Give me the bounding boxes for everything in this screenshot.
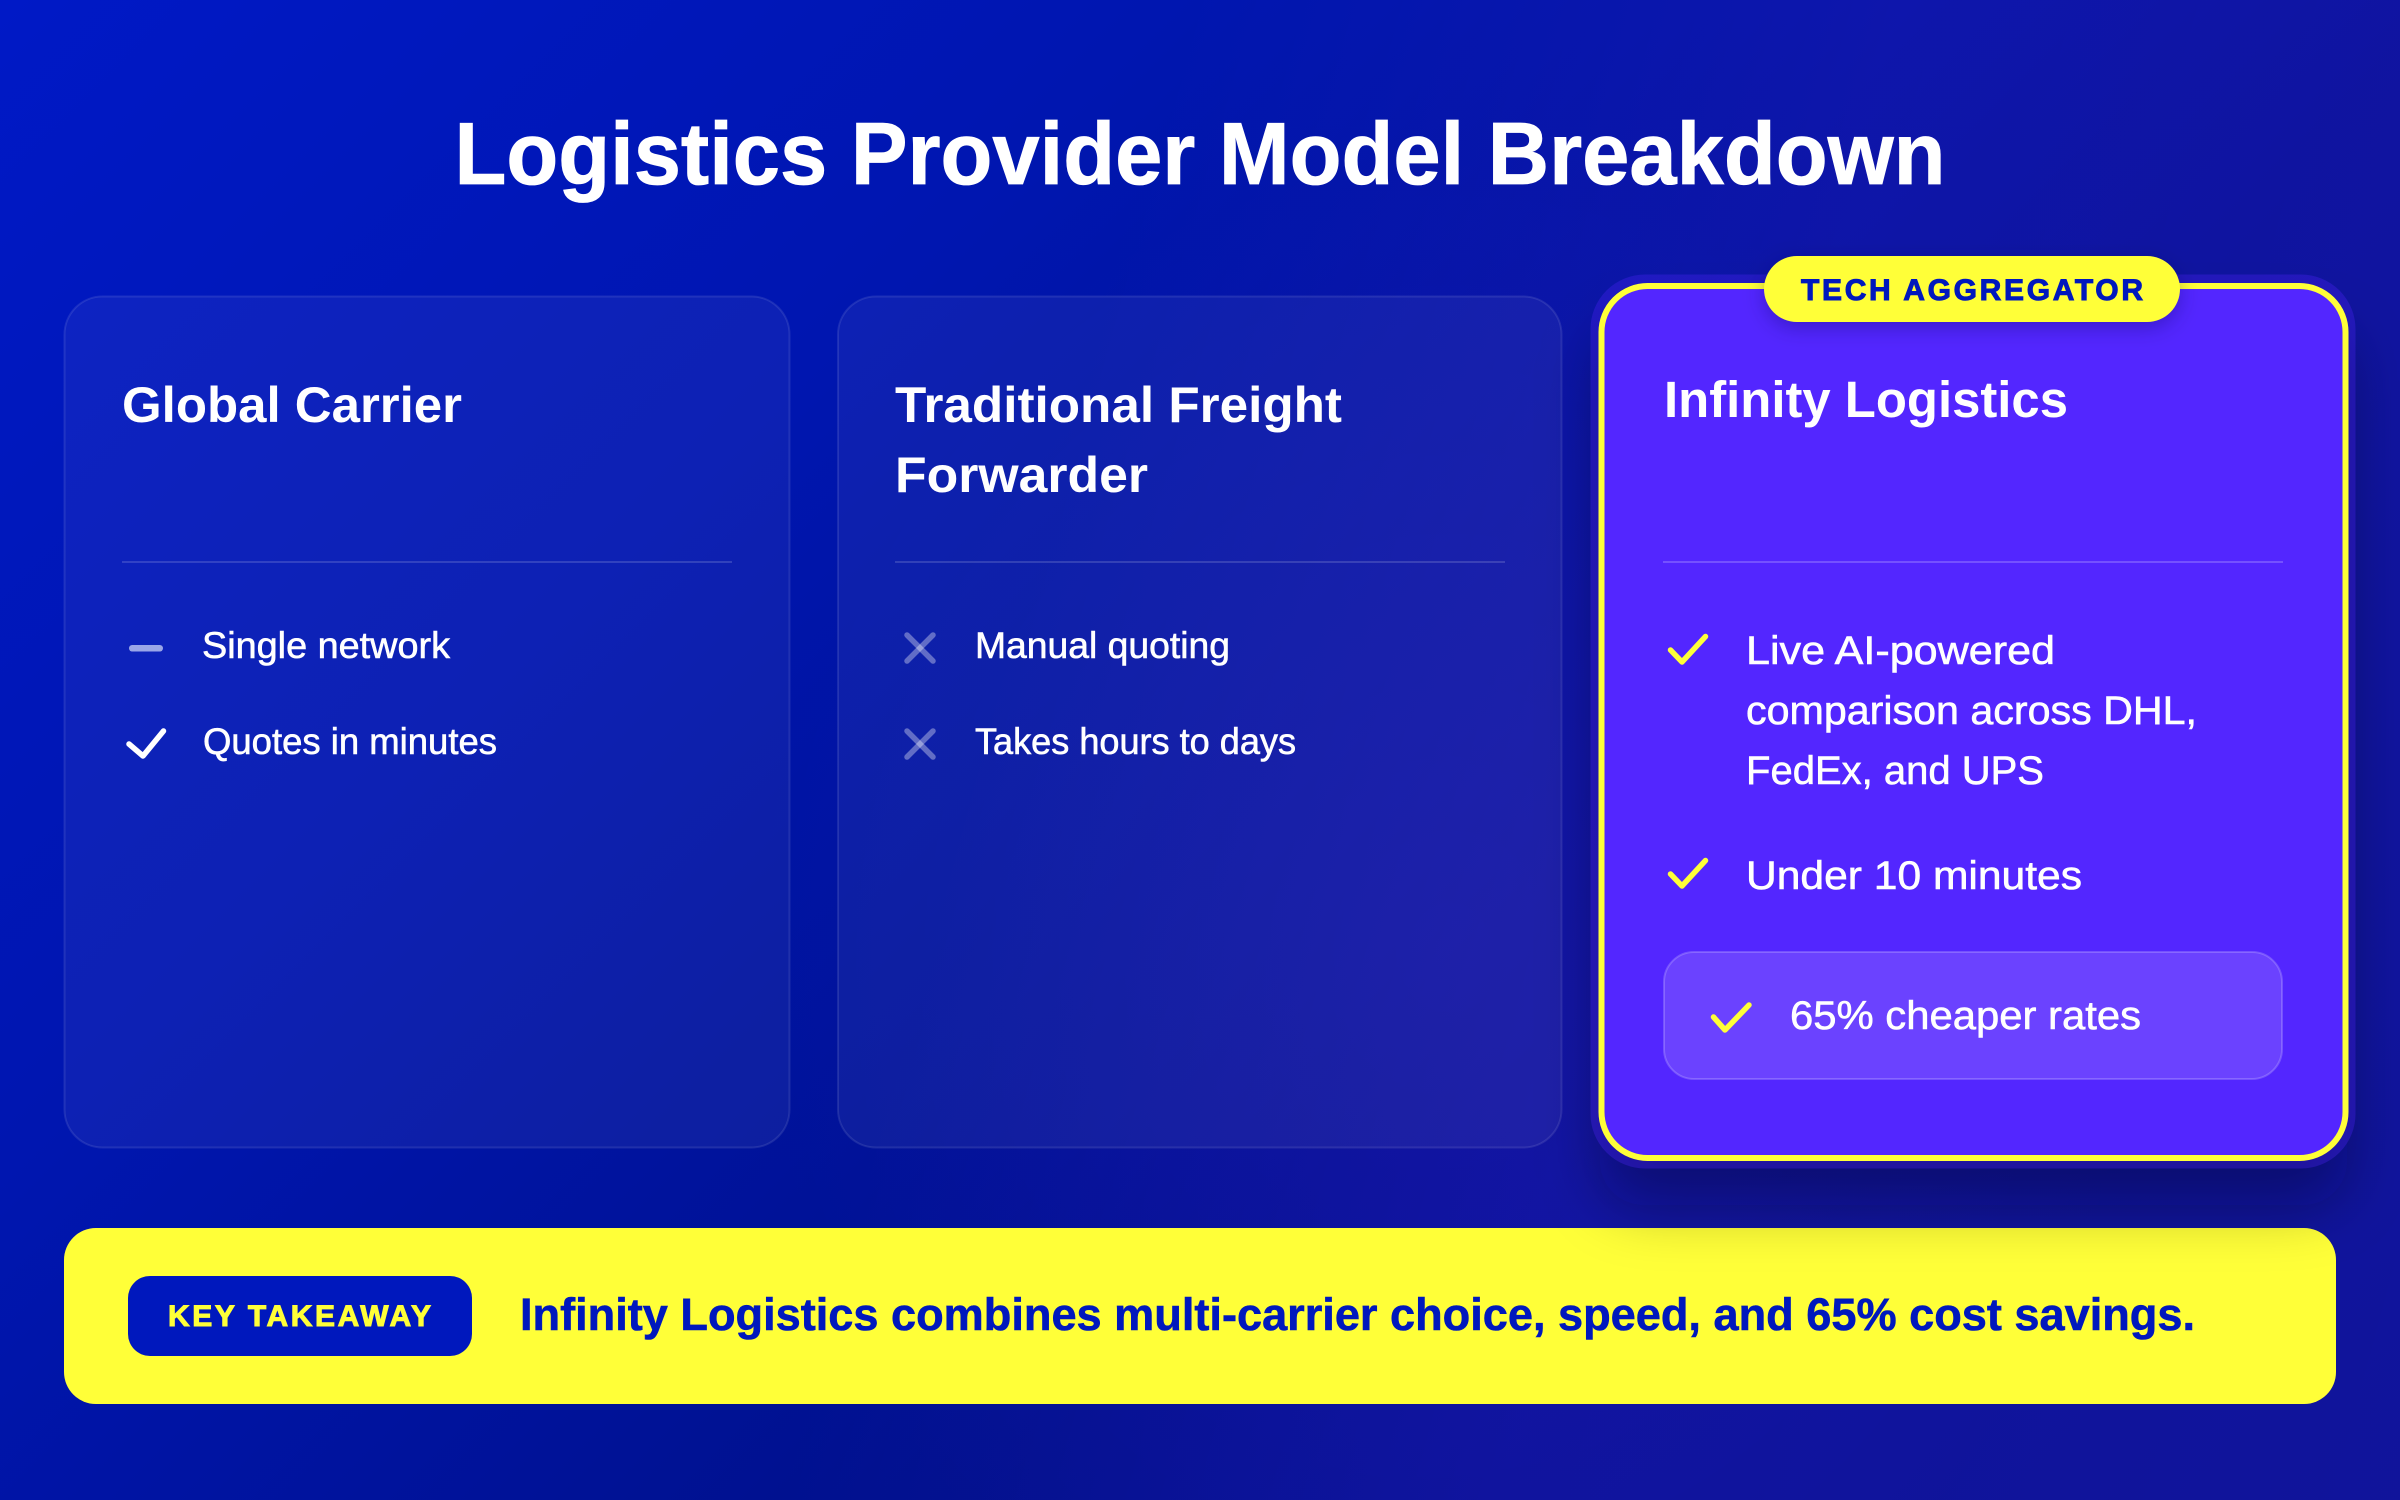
item: under 10 minutes: Under 10 minutes (1746, 854, 2082, 898)
callout: 65% cheaper rates: 65% cheaper rates (1790, 994, 2141, 1038)
item: quotes in minutes: Quotes in minutes (203, 721, 497, 762)
badge: tech aggregator: TECH AGGREGATOR (1801, 274, 2143, 307)
key takeaway banner (64, 1228, 2336, 1404)
title: Logistics Provider Model Breakdown (454, 104, 1946, 203)
callout: 65% cheaper rates (1664, 952, 2282, 1079)
item: live comparison (1670, 629, 2197, 793)
item: single network: Single network (202, 625, 451, 666)
heading: traditional freight forwarder (895, 377, 1342, 503)
heading: traditional freight forwarder: Forwarder (895, 447, 1148, 503)
heading: traditional freight forwarder: Traditional Freight (895, 377, 1342, 433)
badge: key takeaway: KEY TAKEAWAY (168, 1300, 431, 1333)
takeaway text: Infinity Logistics combines multi-carrier choice, speed, and 65% cost savings. (520, 1289, 2195, 1340)
item: live comparison: FedEx, and UPS (1746, 749, 2044, 793)
item: takes hours to days: Takes hours to days (975, 721, 1296, 762)
panel: infinity logistics (1595, 256, 2351, 1205)
badge: tech aggregator (1764, 256, 2180, 328)
badge: key takeaway (128, 1276, 472, 1356)
heading: infinity logistics: Infinity Logistics (1664, 371, 2068, 428)
item: live comparison: comparison across DHL, (1746, 689, 2197, 733)
item: manual quoting: Manual quoting (975, 625, 1230, 666)
panel: traditional freight forwarder (838, 296, 1562, 1148)
item: live comparison: Live AI-powered (1746, 629, 2055, 673)
panel: global carrier (64, 296, 790, 1148)
heading: global carrier: Global Carrier (122, 377, 462, 433)
